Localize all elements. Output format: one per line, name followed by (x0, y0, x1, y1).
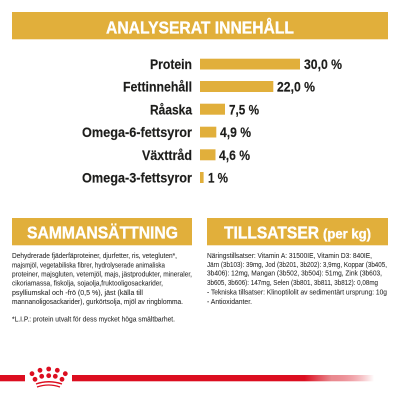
row: crude ash: 7,5 % (229, 102, 259, 118)
text block: additives: Näringstillsatser: Vitamin A: 31500IE, Vitamin D3: 840IE, (207, 251, 372, 260)
row: omega 6: 4,9 % (220, 125, 251, 140)
heading: analyserat innehåll: ANALYSERAT INNEHÅLL (106, 17, 294, 37)
heading: tillsatser: TILLSATSER (224, 222, 319, 242)
panel: additives header (207, 218, 388, 245)
text block: composition: Dehydrerade fjäderfäproteiner, djurfetter, ris, vetegluten*, (12, 251, 177, 260)
text block: composition: majsmjöl, vegetabiliska fibrer, hydrolyserade animaliska (12, 260, 166, 269)
row: protein: 30,0 % (304, 57, 342, 72)
row: protein (150, 57, 342, 72)
row: fibre (142, 148, 250, 163)
row: fat (123, 80, 315, 94)
text block: additives (207, 251, 387, 306)
icon: royal canin crown (30, 367, 68, 387)
row: crude ash: Råaska (150, 102, 192, 118)
panel: analysed content header (12, 12, 388, 39)
text block: composition (12, 251, 192, 306)
row: omega 3: 1 % (208, 171, 228, 186)
heading: sammansättning: SAMMANSÄTTNING (27, 222, 178, 242)
footer: red line right segment with fade (72, 375, 374, 381)
footnote: *L.I.P.: protein utvalt för dess mycket höga smältbarhet. (12, 314, 175, 324)
footer: red line left segment (0, 375, 25, 381)
text block: composition: proteiner, majsgluten, vetemjöl, majs, jästprodukter, mineraler, (12, 269, 192, 278)
row: fibre: 4,6 % (219, 148, 250, 163)
panel: composition header (12, 218, 192, 245)
heading: per kg: (per kg) (323, 226, 371, 241)
row: fat: 22,0 % (277, 80, 315, 94)
row: fat: Fettinnehåll (123, 80, 192, 94)
text block: additives: - Antioxidanter. (207, 297, 252, 306)
bar chart: nutrient percentages (82, 57, 342, 186)
text block: composition: mannanoligosackarider), gurkörtsolja, mjöl av ringblomma. (12, 297, 183, 306)
text block: composition: psylliumskal och -frö (0,5 %), jäst (källa till (12, 288, 143, 297)
row: protein: Protein (150, 57, 192, 72)
row: crude ash (150, 102, 259, 118)
row: omega 6: Omega-6-fettsyror (82, 125, 193, 140)
row: omega 6 (82, 125, 251, 140)
text block: composition: cikoriamassa, fiskolja, sojaolja,fruktooligosackarider, (12, 278, 163, 287)
row: omega 3: Omega-3-fettsyror (82, 171, 193, 186)
row: fibre: Växttråd (142, 148, 192, 163)
